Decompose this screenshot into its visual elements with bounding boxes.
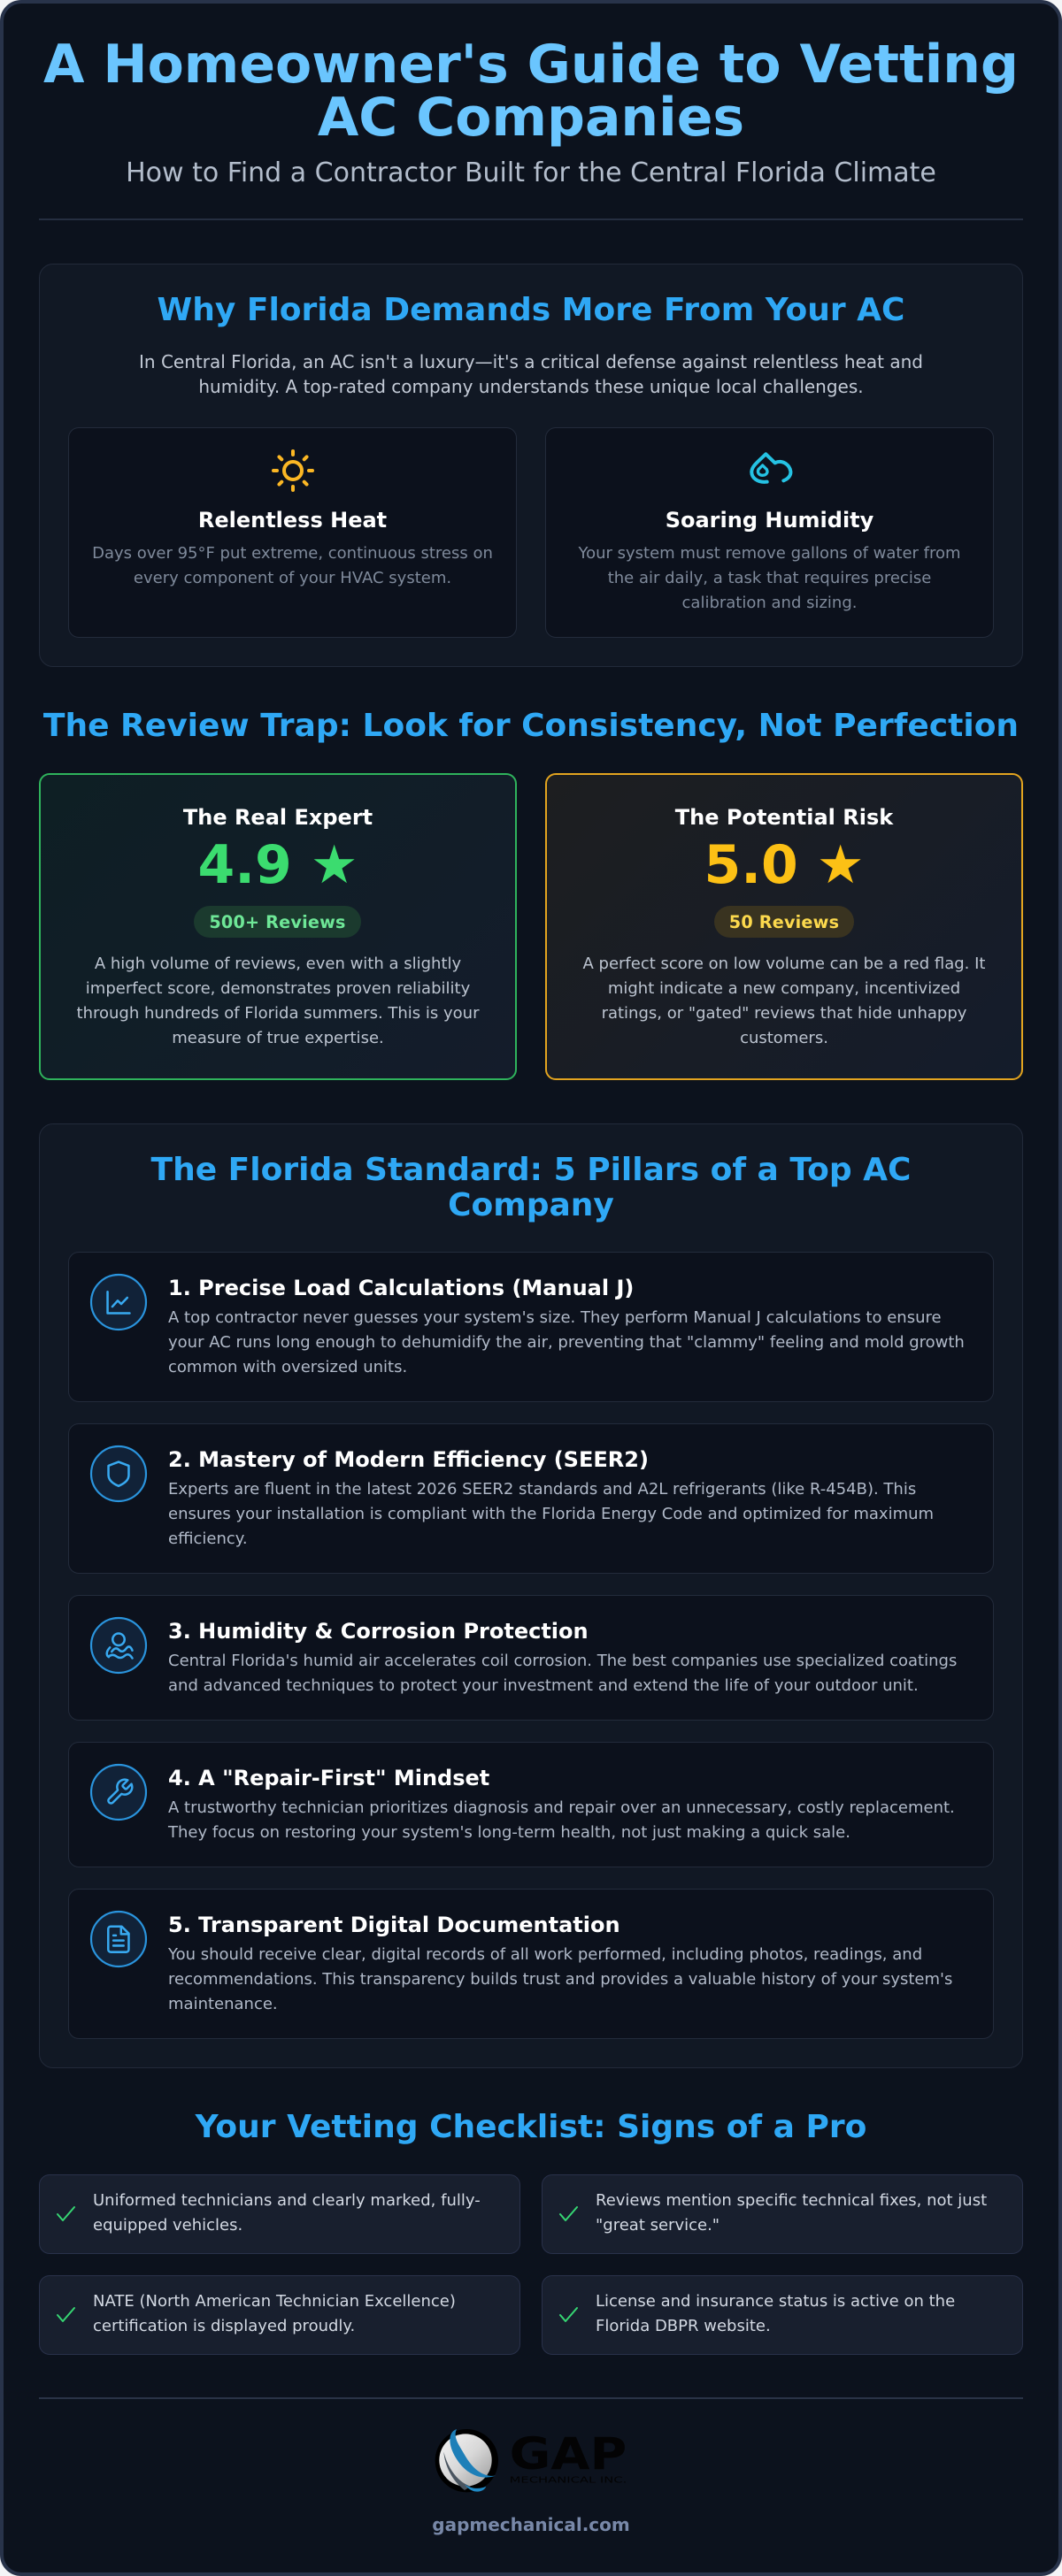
- heading: five pillars: Company: [448, 1187, 614, 1223]
- footer website: gapmechanical.com: [432, 2514, 630, 2535]
- badge: 500+ reviews: [194, 906, 361, 938]
- pillar 5 text: You should receive clear, digital records of all work performed, including photos, readings, and: [168, 1945, 922, 1964]
- heading: five pillars: [150, 1152, 911, 1223]
- heading: why Florida: Why Florida Demands More From Your AC: [158, 292, 904, 328]
- check icon 3: [57, 2307, 75, 2322]
- checklist text 3: [93, 2292, 456, 2335]
- checklist text 2: [596, 2191, 987, 2235]
- potential risk text: A perfect score on low volume can be a red flag. It: [582, 954, 985, 973]
- pillar 4 text: They focus on restoring your system's long-term health, not just making a quick sale.: [168, 1823, 850, 1842]
- rating 4.9: 4.9 ★: [198, 834, 358, 896]
- logo: GAP Mechanical: [435, 2428, 627, 2493]
- heading: five pillars: The Florida Standard: 5 Pillars of a Top AC: [151, 1152, 911, 1188]
- real expert text: [77, 954, 480, 1047]
- icon: document: [90, 1911, 147, 1967]
- card: relentless heat: [68, 427, 517, 638]
- check icon 4: [559, 2307, 578, 2322]
- intro text: In Central Florida, an AC isn't a luxury—it's a critical defense against relentless heat and: [139, 351, 923, 372]
- checklist item 1: [39, 2174, 520, 2254]
- relentless heat title: Relentless Heat: [198, 508, 387, 533]
- subtitle: How to Find a Contractor Built for the Central Florida Climate: [126, 157, 936, 188]
- panel: five pillars: [39, 1123, 1023, 2068]
- soaring humidity title: Soaring Humidity: [666, 508, 873, 533]
- icon: person in water: [90, 1617, 147, 1674]
- title: [43, 34, 1019, 149]
- potential risk title: The Potential Risk: [675, 805, 893, 830]
- checklist text 2: "great service.": [596, 2216, 720, 2235]
- checklist text 1: Uniformed technicians and clearly marked, fully-: [93, 2191, 481, 2210]
- relentless heat text: Days over 95°F put extreme, continuous stress on: [92, 544, 493, 563]
- soaring humidity text: the air daily, a task that requires precise: [608, 569, 931, 587]
- card: the potential risk: [545, 773, 1023, 1080]
- heading: checklist: Your Vetting Checklist: Signs of a Pro: [196, 2109, 866, 2145]
- checklist text 1: equipped vehicles.: [93, 2216, 242, 2235]
- icon: wrench: [90, 1764, 147, 1821]
- pillar 1 text: common with oversized units.: [168, 1358, 407, 1376]
- real expert text: through hundreds of Florida summers. This is your: [77, 1004, 479, 1023]
- checklist text 4: License and insurance status is active on the: [596, 2292, 955, 2311]
- potential risk text: customers.: [740, 1029, 828, 1047]
- check icon 1: [57, 2206, 75, 2221]
- real expert text: A high volume of reviews, even with a slightly: [95, 954, 461, 973]
- pillar 2 card: [68, 1423, 994, 1574]
- pillar 2 text: [168, 1480, 934, 1548]
- title: AC Companies: [318, 87, 744, 149]
- pillar 1 text: [168, 1308, 965, 1376]
- pillar 1 title: 1. Precise Load Calculations (Manual J): [168, 1276, 634, 1300]
- badge: 50 reviews: 50 Reviews: [729, 912, 839, 932]
- pillar 3 text: [168, 1652, 957, 1695]
- checklist text 4: [596, 2292, 955, 2335]
- pillar 5 card: [68, 1889, 994, 2039]
- checklist text 4: Florida DBPR website.: [596, 2317, 771, 2335]
- pillar 4 title: 4. A "Repair-First" Mindset: [168, 1766, 489, 1790]
- soaring humidity text: Your system must remove gallons of water from: [578, 544, 961, 563]
- pillar 4 card: [68, 1742, 994, 1867]
- intro text: humidity. A top-rated company understands these unique local challenges.: [198, 376, 864, 397]
- pillar 2 text: efficiency.: [168, 1530, 248, 1548]
- card: the real expert: [39, 773, 517, 1080]
- card: soaring humidity: [545, 427, 994, 638]
- pillar 3 text: Central Florida's humid air accelerates coil corrosion. The best companies use specialized coatings: [168, 1652, 957, 1670]
- badge: 500+ reviews: 500+ Reviews: [209, 912, 346, 932]
- soaring humidity text: calibration and sizing.: [682, 594, 857, 612]
- intro text: [139, 351, 923, 397]
- pillar 4 text: A trustworthy technician prioritizes diagnosis and repair over an unnecessary, costly replacement.: [168, 1798, 955, 1817]
- checklist item 3: [39, 2275, 520, 2355]
- icon: sun: [272, 449, 314, 492]
- potential risk text: ratings, or "gated" reviews that hide unhappy: [602, 1004, 966, 1023]
- heading: review trap: The Review Trap: Look for Consistency, Not Perfection: [43, 708, 1019, 744]
- logo: GAP Mechanical: GAP: [510, 2428, 627, 2480]
- pillar 5 title: 5. Transparent Digital Documentation: [168, 1913, 620, 1937]
- icon: shield: [90, 1445, 147, 1502]
- pillar 1 text: A top contractor never guesses your system's size. They perform Manual J calculations to ensure: [168, 1308, 942, 1327]
- pillar 1 text: your AC runs long enough to dehumidify the air, preventing that "clammy" feeling and mold growth: [168, 1333, 965, 1352]
- potential risk text: might indicate a new company, incentivized: [608, 979, 960, 998]
- pillar 5 text: recommendations. This transparency builds trust and provides a valuable history of your system's: [168, 1970, 952, 1989]
- checklist item 2: [542, 2174, 1023, 2254]
- rating 5.0: 5.0 ★: [704, 834, 864, 896]
- pillar 1 card: [68, 1252, 994, 1402]
- pillar 4 text: [168, 1798, 955, 1842]
- pillar 3 card: [68, 1595, 994, 1721]
- checklist text 1: [93, 2191, 481, 2235]
- checklist text 3: certification is displayed proudly.: [93, 2317, 355, 2335]
- real expert text: imperfect score, demonstrates proven reliability: [86, 979, 470, 998]
- panel: why Florida demands more: [39, 264, 1023, 667]
- badge: 50 reviews: [714, 906, 854, 938]
- pillar 2 text: Experts are fluent in the latest 2026 SEER2 standards and A2L refrigerants (like R-454B). This: [168, 1480, 916, 1499]
- title: A Homeowner's Guide to Vetting: [43, 34, 1019, 96]
- real expert title: The Real Expert: [183, 805, 373, 830]
- pillar 2 title: 2. Mastery of Modern Efficiency (SEER2): [168, 1447, 649, 1472]
- checklist text 3: NATE (North American Technician Excellence): [93, 2292, 456, 2311]
- potential risk text: [582, 954, 985, 1047]
- relentless heat text: every component of your HVAC system.: [134, 569, 451, 587]
- checklist item 4: [542, 2275, 1023, 2355]
- relentless heat text: [92, 544, 493, 587]
- check icon 2: [559, 2206, 578, 2221]
- pillar 3 title: 3. Humidity & Corrosion Protection: [168, 1619, 589, 1644]
- pillar 5 text: maintenance.: [168, 1995, 278, 2013]
- pillar 3 text: and advanced techniques to protect your investment and extend the life of your outdoor unit.: [168, 1676, 919, 1695]
- soaring humidity text: [578, 544, 961, 612]
- logo: GAP Mechanical: MECHANICAL INC.: [510, 2476, 627, 2486]
- real expert text: measure of true expertise.: [172, 1029, 384, 1047]
- icon: humidity drops: [750, 452, 793, 484]
- icon: line chart: [90, 1274, 147, 1330]
- checklist text 2: Reviews mention specific technical fixes, not just: [596, 2191, 987, 2210]
- pillar 2 text: ensures your installation is compliant with the Florida Energy Code and optimized for maximum: [168, 1505, 934, 1523]
- pillar 5 text: [168, 1945, 952, 2013]
